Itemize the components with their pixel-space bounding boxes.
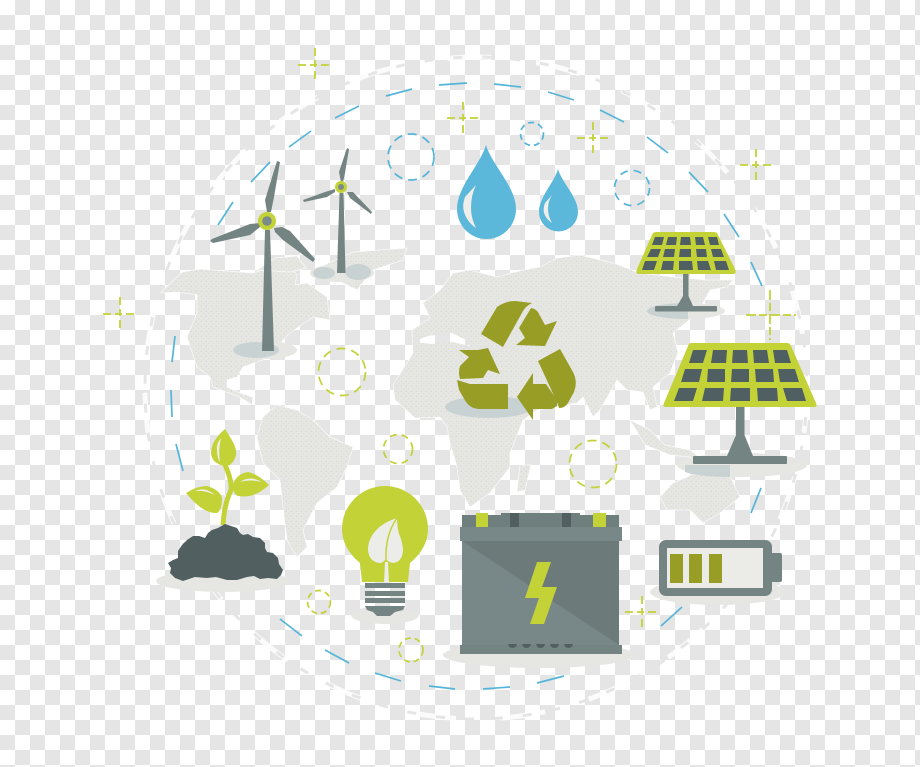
circle: green centre left [318, 348, 366, 396]
map: North America [160, 263, 330, 405]
icon: car battery [443, 513, 635, 668]
circle: green small [384, 434, 412, 464]
plus: top right [577, 122, 611, 155]
icon: small water drop [539, 169, 578, 232]
plus: bottom right [625, 596, 659, 629]
plus: far right [740, 149, 773, 183]
icon: small solar panel [636, 232, 736, 319]
icon: large water drop [457, 145, 516, 239]
plus: left [103, 297, 137, 331]
map: Arctic islands [257, 256, 306, 272]
map: Mediterranean sea [412, 333, 470, 346]
dashed plus signs [103, 48, 796, 629]
plus: large right [746, 290, 796, 340]
plus: top left [298, 48, 332, 82]
icon: charge level battery [650, 540, 786, 605]
circle: green bottom [399, 638, 423, 662]
icon: recycling symbol [445, 301, 576, 420]
icon: light bulb with leaf [342, 486, 428, 624]
icon: large solar panel [663, 343, 817, 477]
map: Africa and Eurasia [393, 255, 733, 507]
icon: large wind turbine [210, 161, 315, 359]
map: South America [257, 405, 353, 557]
inner blue dashed ring [171, 83, 762, 689]
map: south-east Asian islands [630, 420, 700, 458]
outer dashed ring [145, 57, 807, 719]
world map [160, 248, 740, 557]
map: Australia [660, 470, 740, 523]
icon: small wind turbine [303, 148, 374, 282]
plus: top centre [447, 102, 480, 135]
map: Greenland [310, 248, 407, 290]
circle: blue medium [614, 170, 650, 206]
circle: green centre right [570, 440, 616, 488]
map: Madagascar [517, 465, 531, 492]
circle: blue large [388, 134, 434, 180]
dashed decorative circles [308, 122, 650, 662]
circle: green lower [308, 590, 330, 614]
icon: sprout in soil [156, 429, 290, 592]
circle: blue small [520, 122, 544, 146]
